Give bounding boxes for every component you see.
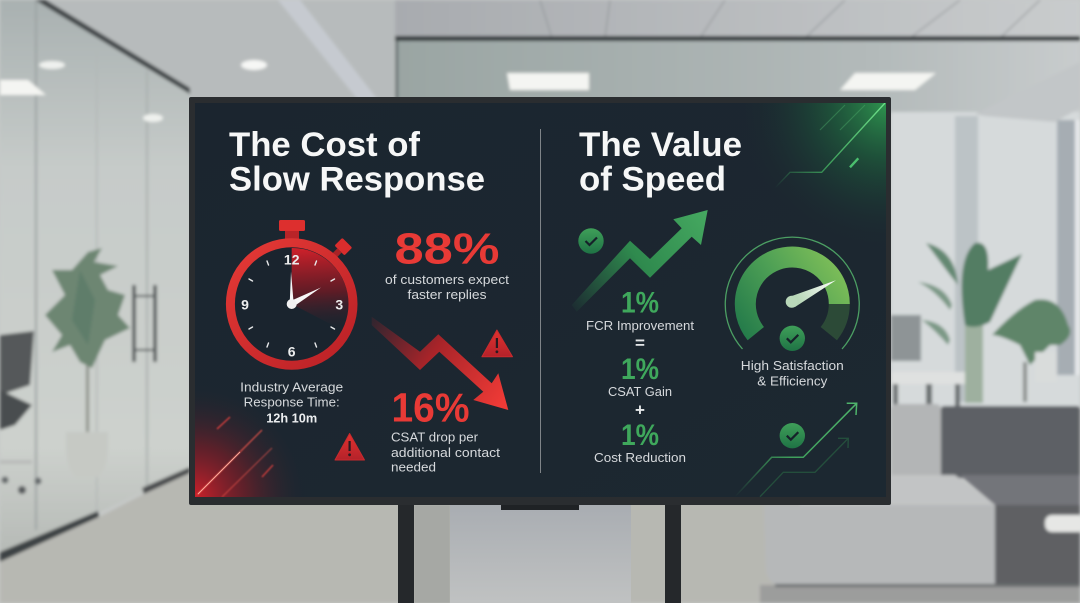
formula stats: 1%	[621, 287, 659, 320]
label: industry average: Industry Average	[240, 380, 343, 395]
stat: 88%: of customers expect	[385, 272, 509, 287]
formula stats: =	[635, 334, 645, 352]
plants, right	[918, 243, 1070, 403]
icon: warning upper	[482, 330, 512, 357]
ceiling lights, left	[0, 61, 163, 122]
icon: stopwatch: 12	[284, 252, 300, 268]
icon: check upper	[578, 228, 604, 254]
screen surface	[195, 103, 886, 497]
corner glow: green	[778, 103, 886, 210]
label: industry average	[240, 380, 343, 425]
title: value	[579, 126, 742, 199]
divider	[540, 129, 541, 473]
icon: stopwatch: 3	[335, 296, 343, 312]
stat: 88%: 88%	[394, 224, 500, 273]
arrow: rising green	[572, 210, 708, 312]
plant, left	[45, 248, 130, 477]
title: cost: The Cost of	[229, 126, 421, 164]
formula stats	[586, 287, 694, 465]
icon: warning lower	[335, 434, 364, 460]
glass wall, left	[0, 0, 190, 558]
right wall and window	[891, 62, 1080, 412]
label: industry average: 12h 10m	[266, 410, 317, 425]
stat: 88%	[385, 224, 509, 302]
icon: check lower	[780, 423, 805, 448]
stat: 16%: needed	[391, 460, 436, 475]
monitor foot notch	[501, 505, 579, 510]
monitor and desk	[891, 315, 981, 406]
ceiling, right	[395, 0, 1080, 115]
title: cost	[229, 126, 485, 199]
label: high satisfaction	[741, 358, 844, 389]
formula stats: 1%	[621, 353, 659, 386]
formula stats: Cost Reduction	[594, 450, 686, 465]
chair	[0, 331, 42, 494]
formula stats: +	[635, 400, 645, 420]
formula stats: CSAT Gain	[608, 384, 672, 399]
label: high satisfaction: & Efficiency	[757, 374, 828, 389]
label: industry average: Response Time:	[244, 395, 340, 410]
stat: 16%: CSAT drop per	[391, 430, 479, 445]
panel: cost of slow response	[229, 126, 512, 475]
icon: rising lines	[735, 403, 857, 497]
display screen	[189, 97, 891, 510]
stand column	[398, 505, 681, 603]
stat: 16%	[391, 385, 500, 475]
ceiling, left of glass room	[30, 0, 400, 100]
formula stats: 1%	[621, 419, 659, 452]
floor	[0, 473, 800, 603]
panel: value of speed	[572, 126, 859, 497]
icon: stopwatch: 6	[288, 344, 296, 360]
corner glow: red	[195, 405, 287, 497]
stat: 16%: 16%	[392, 385, 470, 431]
arrow: falling red	[372, 317, 508, 410]
icon: stopwatch: 9	[241, 296, 249, 312]
gauge	[725, 237, 859, 351]
title: value: The Value	[579, 126, 742, 164]
title: cost: Slow Response	[229, 161, 485, 199]
icon: stopwatch	[230, 220, 353, 365]
label: high satisfaction: High Satisfaction	[741, 358, 844, 373]
stat: 16%: additional contact	[391, 445, 500, 460]
door handle	[134, 285, 155, 362]
title: value: of Speed	[579, 161, 726, 199]
stat: 88%: faster replies	[408, 287, 487, 302]
formula stats: FCR Improvement	[586, 318, 694, 333]
monitor bezel	[189, 97, 891, 505]
sofa	[760, 404, 1080, 603]
